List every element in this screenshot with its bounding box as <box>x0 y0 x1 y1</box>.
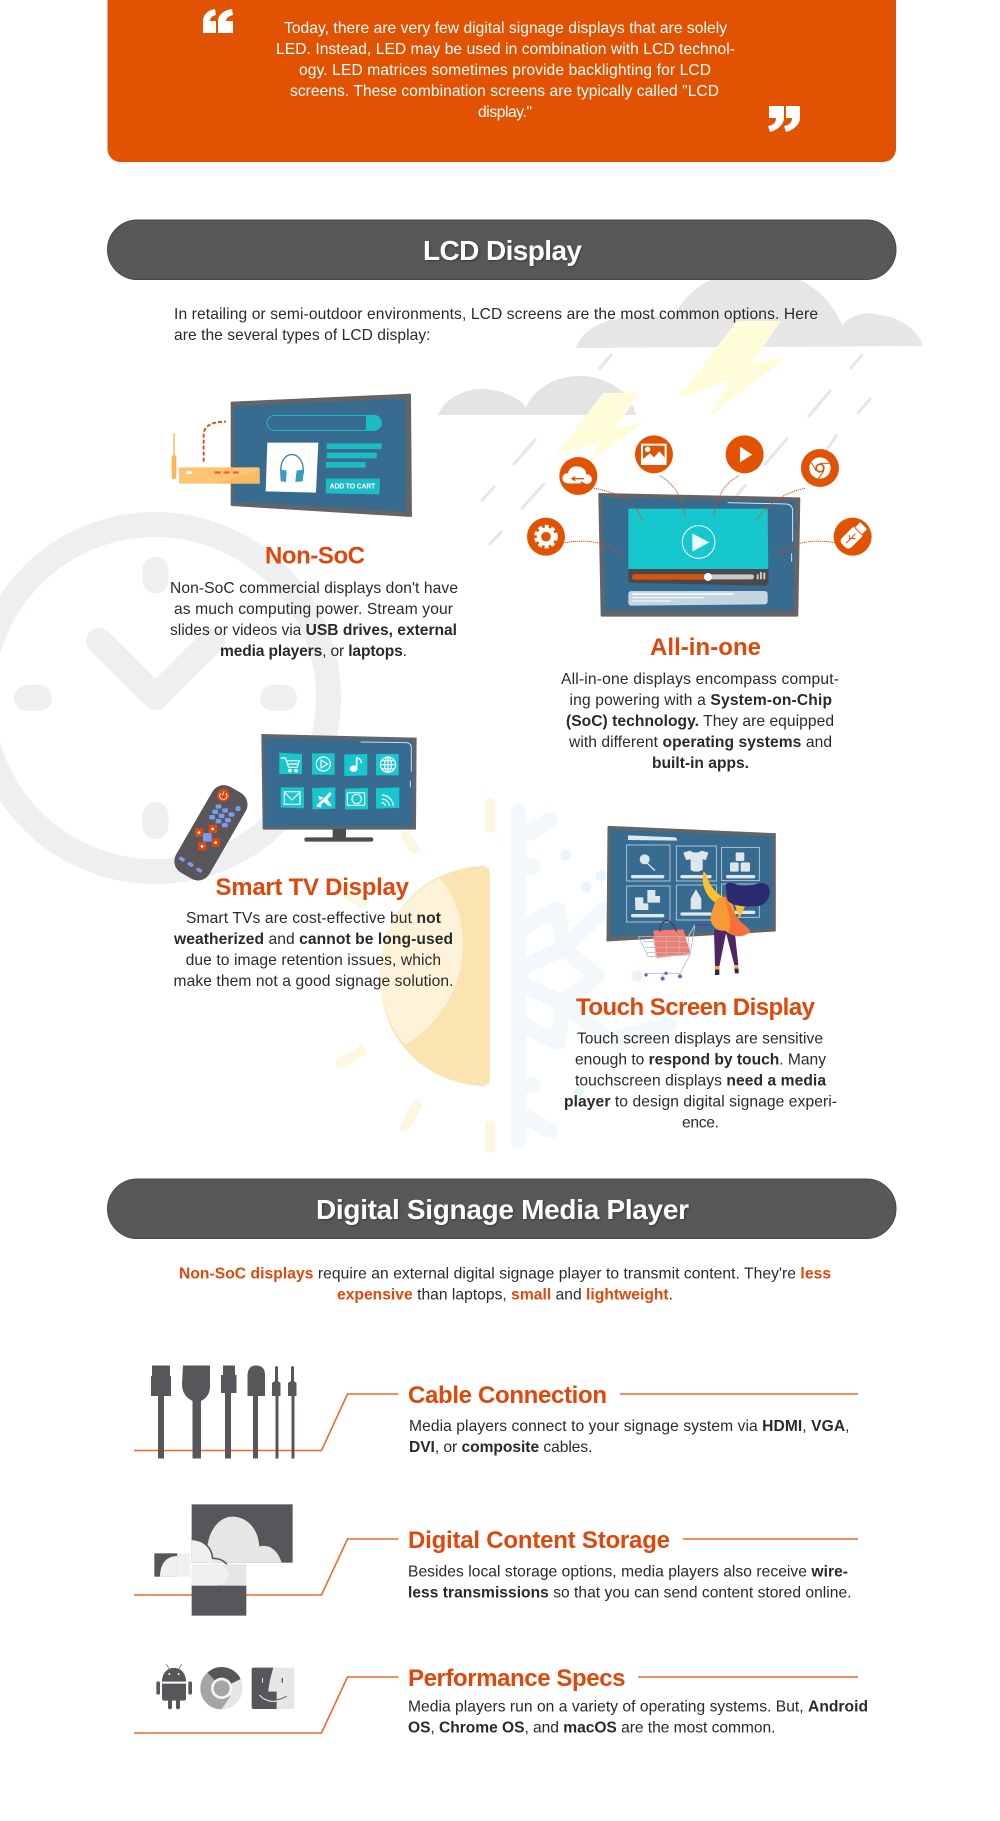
description: Smart TV Display: make them not a good signage solution. <box>174 973 454 990</box>
description: Touch Screen Display: Touch screen displays are sensitive <box>577 1030 823 1048</box>
intro text: LCD: In retailing or semi-outdoor environments, LCD screens are the most common options. Here <box>174 306 818 323</box>
connector line <box>134 1394 398 1450</box>
description: All-in-one: built-in apps. <box>652 755 749 772</box>
title rule <box>638 1676 858 1678</box>
icon: browser <box>801 449 839 487</box>
description: All-in-one: (SoC) technology. They are equipped <box>566 713 834 730</box>
connector line <box>134 1677 398 1733</box>
description: Smart TV Display: weatherized and cannot be long-used <box>173 931 453 948</box>
illustration: smart TV and remote <box>169 735 416 885</box>
card: Non-SoC <box>170 395 458 660</box>
icon: cables <box>151 1366 296 1458</box>
icon: image <box>635 435 673 473</box>
quote text: screens. These combination screens are typically called "LCD <box>290 83 719 100</box>
intro text: LCD <box>174 306 818 344</box>
icon: opening quote <box>203 9 233 33</box>
description: Digital Content Storage: Besides local storage options, media players also receive wire- <box>408 1564 848 1580</box>
icon: cloud sync <box>559 457 597 495</box>
heading: LCD Display: LCD Display <box>423 235 582 266</box>
description: All-in-one: with different operating systems and <box>568 734 832 751</box>
description: Smart TV Display <box>173 910 454 990</box>
card: Smart TV Display <box>169 735 454 990</box>
description: Digital Content Storage: less transmissions so that you can send content stored online. <box>408 1584 852 1602</box>
quote text: display." <box>478 104 532 121</box>
heading: Digital Signage Media Player <box>108 1179 896 1238</box>
icon: Android <box>156 1664 192 1709</box>
background: storm clouds and rain <box>438 270 923 544</box>
title: Smart TV Display: Smart TV Display <box>216 874 410 901</box>
description: All-in-one <box>561 671 839 772</box>
intro text: media player: Non-SoC displays require an external digital signage player to transmit content. They're less <box>179 1266 831 1282</box>
icons: operating systems <box>156 1664 294 1709</box>
description: Non-SoC: as much computing power. Stream your <box>174 601 453 618</box>
description: Cable Connection <box>409 1418 850 1456</box>
connector line <box>134 1539 398 1595</box>
item: Performance Specs <box>134 1664 868 1736</box>
description: Touch Screen Display: player to design digital signage experi- <box>564 1094 837 1110</box>
description: Cable Connection: DVI, or composite cables. <box>409 1439 592 1456</box>
description: All-in-one: All-in-one displays encompass comput- <box>561 671 839 688</box>
icon: closing quote <box>768 106 800 132</box>
quote text: Today, there are very few digital signage displays that are solely <box>284 20 727 37</box>
intro text: media player <box>179 1266 831 1304</box>
quote text <box>276 20 735 121</box>
icon: play <box>726 435 764 473</box>
background: half snowflake <box>518 812 668 1140</box>
title: Cable Connection: Cable Connection <box>408 1382 607 1409</box>
description: Smart TV Display: due to image retention issues, which <box>186 952 441 969</box>
heading: Digital Signage Media Player: Digital Signage Media Player <box>316 1194 689 1225</box>
description: Touch Screen Display <box>564 1030 837 1132</box>
icon: cloud mosaic <box>154 1504 293 1616</box>
description: Cable Connection: Media players connect to your signage system via HDMI, VGA, <box>409 1418 850 1435</box>
illustration: monitor with router <box>172 395 411 516</box>
card: All-in-one <box>527 435 872 772</box>
card: Touch Screen Display <box>564 827 837 1132</box>
icon: settings gear <box>527 518 565 556</box>
quote text: ogy. LED matrices sometimes provide backlighting for LCD <box>299 62 711 79</box>
panel: quote <box>108 0 896 162</box>
title: Digital Content Storage: Digital Content Storage <box>408 1527 670 1554</box>
description: Touch Screen Display: ence. <box>682 1114 719 1132</box>
icon: Finder <box>252 1668 294 1709</box>
title: All-in-one: All-in-one <box>650 634 761 661</box>
description: All-in-one: ing powering with a System-on-Chip <box>570 692 832 709</box>
title: Non-SoC: Non-SoC <box>265 542 365 570</box>
description: Non-SoC: media players, or laptops. <box>220 643 407 660</box>
item: Digital Content Storage <box>134 1504 858 1616</box>
title: Touch Screen Display: Touch Screen Display <box>576 994 816 1021</box>
remote <box>169 780 252 885</box>
background: half sun <box>341 803 490 1148</box>
icon: Chrome <box>200 1667 243 1709</box>
description: Smart TV Display: Smart TVs are cost-effective but not <box>186 910 441 927</box>
illustration: shopper at touch screen <box>607 827 775 981</box>
description: Non-SoC <box>170 580 458 660</box>
heading: LCD Display <box>108 220 896 280</box>
illustration: monitor with router: ADD TO CART <box>330 484 376 491</box>
background: clock <box>0 524 328 872</box>
title rule <box>620 1393 858 1395</box>
description: Performance Specs: Media players run on a variety of operating systems. But, Android <box>408 1698 868 1716</box>
description: Performance Specs <box>408 1698 868 1736</box>
item: Cable Connection <box>134 1366 858 1458</box>
intro text: media player: expensive than laptops, small and lightweight. <box>337 1286 673 1304</box>
description: Digital Content Storage <box>408 1564 852 1602</box>
description: Non-SoC: slides or videos via USB drives, external <box>170 622 457 639</box>
intro text: LCD: are the several types of LCD display: <box>174 327 430 344</box>
quote text: LED. Instead, LED may be used in combination with LCD technol- <box>276 41 735 58</box>
title: Performance Specs: Performance Specs <box>408 1665 626 1692</box>
description: Performance Specs: OS, Chrome OS, and macOS are the most common. <box>408 1720 776 1736</box>
description: Touch Screen Display: touchscreen displays need a media <box>575 1072 826 1090</box>
description: Touch Screen Display: enough to respond by touch. Many <box>575 1052 826 1068</box>
illustration: player display with app icons <box>527 435 872 616</box>
icon: USB drive <box>834 518 872 556</box>
title rule <box>683 1538 858 1540</box>
description: Non-SoC: Non-SoC commercial displays don't have <box>170 580 458 597</box>
